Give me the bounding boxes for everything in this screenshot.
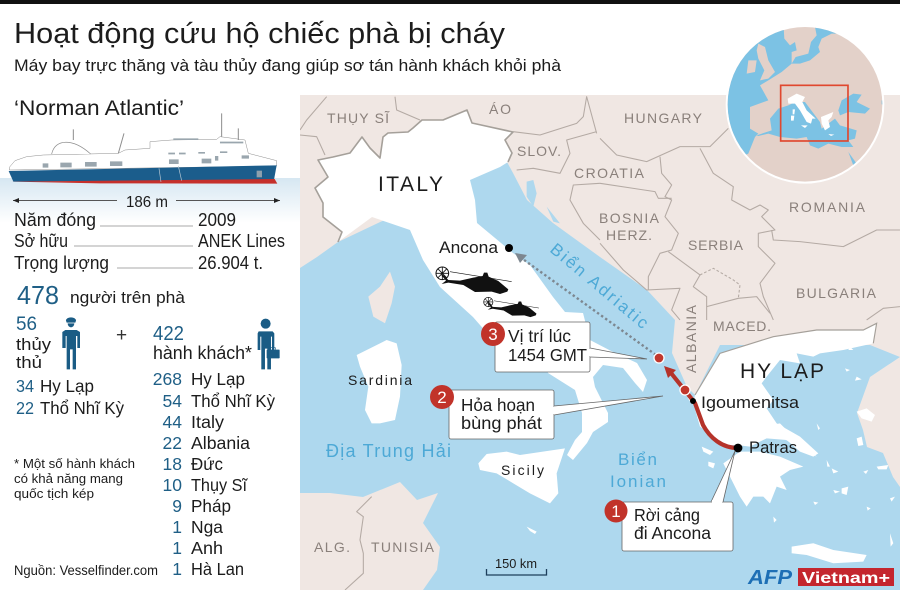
passenger nationalities: 44 [163, 412, 182, 432]
label: ALBANIA: ALBANIA [683, 304, 699, 373]
panel: map [300, 95, 900, 590]
label: MACED.: MACED. [713, 318, 771, 334]
footnote: có khả năng mang [14, 471, 123, 486]
passenger nationalities: 22 [163, 433, 182, 453]
callout 3: 1454 GMT [508, 345, 587, 365]
passenger nationalities: Anh [191, 538, 223, 558]
label: CROATIA: CROATIA [574, 165, 645, 181]
subtitle: Máy bay trực thăng và tàu thủy đang giúp sơ tán hành khách khỏi phà [14, 56, 562, 75]
callout 2: bùng phát [461, 413, 542, 433]
footnote [14, 456, 135, 501]
crew count [16, 314, 52, 372]
label: HUNGARY: HUNGARY [624, 110, 703, 126]
label: TUNISIA: TUNISIA [371, 539, 435, 555]
helicopter: small [484, 297, 539, 317]
callout 3: Vị trí lúc [508, 326, 571, 346]
ship facts: Sở hữu [14, 231, 68, 251]
city: Patras: Patras [749, 438, 797, 457]
icon: passenger [258, 319, 280, 369]
ship illustration [9, 113, 277, 184]
label: BOSNIA HERZ.: HERZ. [606, 227, 652, 243]
dimension: 186 m: 186 m [126, 194, 168, 211]
passenger nationalities: Thổ Nhĩ Kỳ [191, 391, 275, 411]
passenger nationalities: Albania [191, 433, 250, 453]
heading: ship name: ‘Norman Atlantic’ [14, 97, 184, 120]
sea [300, 162, 900, 590]
label: Biển Ionian: Biển [618, 450, 657, 469]
crew count: thủy [16, 335, 52, 354]
total people: 478 [17, 280, 59, 310]
passengers count: 422 [153, 323, 184, 345]
callout 1: Rời cảng [634, 505, 700, 525]
passenger nationalities: Nga [191, 517, 223, 537]
passenger nationalities: 268 [153, 369, 182, 389]
label: Sardinia: Sardinia [348, 372, 412, 388]
route: dotted to Ancona [515, 253, 656, 355]
ship facts: 26.904 t. [198, 253, 263, 273]
callout 2: Hỏa hoạn [461, 395, 535, 415]
dimension: 186 m [13, 194, 280, 211]
icon: sailor [62, 317, 80, 369]
scale bar: 150 km [495, 557, 537, 571]
Italy [315, 110, 647, 460]
callout 1: đi Ancona [634, 523, 711, 543]
plus sign: + [116, 325, 127, 346]
passenger nationalities: 1 [172, 538, 182, 558]
Sardinia, Sicily [357, 340, 565, 534]
label: BOSNIA HERZ.: BOSNIA [599, 210, 660, 226]
country borders [600, 128, 900, 320]
passenger nationalities: 10 [163, 475, 182, 495]
label: Biển Ionian [612, 452, 665, 487]
label: SERBIA: SERBIA [688, 237, 744, 253]
passenger nationalities: 9 [172, 496, 182, 516]
city: Ancona: Ancona [439, 238, 499, 257]
water fade [0, 178, 300, 223]
helicopter: large [436, 267, 512, 294]
position marker 3 [654, 353, 664, 363]
Tunisia / Algeria border [345, 497, 372, 590]
passenger nationalities: Pháp [191, 496, 231, 516]
passenger nationalities [153, 369, 275, 579]
title: Hoạt động cứu hộ chiếc phà bị cháy [14, 18, 506, 50]
ship facts: Năm đóng [14, 210, 96, 230]
label: SLOV.: SLOV. [517, 143, 561, 159]
crew nationalities: Hy Lạp [40, 376, 94, 396]
callout 3 [481, 322, 647, 372]
label: BOSNIA HERZ. [600, 214, 659, 240]
ship facts [14, 210, 285, 273]
scale bar [486, 557, 546, 575]
passenger nationalities: Đức [191, 454, 223, 474]
passenger nationalities: 18 [163, 454, 182, 474]
logo: AFP: AFP [747, 567, 793, 589]
callout 3: 3 [488, 325, 498, 344]
passenger nationalities: 1 [172, 517, 182, 537]
footnote: quốc tịch kép [14, 486, 94, 501]
label: Sicily: Sicily [501, 462, 544, 478]
crew nationalities [16, 376, 124, 418]
passenger nationalities: Thụy Sĩ [191, 475, 248, 495]
callout 1: 1 [611, 502, 621, 521]
label: ALG.: ALG. [314, 539, 350, 555]
city: Ancona [439, 242, 513, 253]
label: BULGARIA: BULGARIA [796, 285, 877, 301]
passenger nationalities: Italy [191, 412, 224, 432]
label: HY LẠP: HY LẠP [740, 360, 824, 383]
ship facts: 2009 [198, 210, 236, 230]
Greece [687, 323, 895, 563]
ship facts: ANEK Lines [198, 231, 285, 251]
label: ITALY: ITALY [378, 173, 443, 196]
passengers count: hành khách* [153, 343, 252, 363]
footnote: * Một số hành khách [14, 456, 135, 471]
total people [17, 280, 186, 310]
crew count: thủ [16, 353, 42, 372]
passengers count [153, 323, 252, 363]
source: Nguồn: Vesselfinder.com [14, 563, 158, 578]
label: Địa Trung Hải: Địa Trung Hải [326, 441, 451, 461]
logo: Vietnam+ [798, 568, 894, 587]
crew nationalities: 22 [16, 398, 34, 418]
crew nationalities: 34 [16, 376, 34, 396]
passenger nationalities: 1 [172, 559, 182, 579]
label: ÁO: ÁO [489, 101, 511, 117]
label: Biển Ionian: Ionian [610, 472, 666, 491]
label: ROMANIA: ROMANIA [789, 199, 866, 215]
logo: Vietnam+: Vietnam+ [802, 570, 890, 587]
ship facts: Trọng lượng [14, 253, 109, 273]
passenger nationalities: Hà Lan [191, 559, 244, 579]
callout 2 [430, 385, 663, 439]
Corsica [368, 272, 395, 323]
label: Biển Adriatic: Biển Adriatic [546, 240, 652, 333]
passenger nationalities: Hy Lạp [191, 369, 245, 389]
callout 2: 2 [437, 388, 447, 407]
label: THỤY SĨ: THỤY SĨ [327, 110, 390, 126]
crew count: 56 [16, 314, 37, 335]
total people: người trên phà [70, 288, 186, 307]
callout 1 [604, 451, 735, 551]
city: Patras [734, 442, 796, 453]
passenger nationalities: 54 [163, 391, 182, 411]
city: Igoumenitsa: Igoumenitsa [701, 393, 800, 412]
locator globe [725, 22, 886, 184]
crew nationalities: Thổ Nhĩ Kỳ [40, 398, 124, 418]
route: red from Patras [664, 366, 738, 448]
position marker 2 [680, 385, 690, 395]
